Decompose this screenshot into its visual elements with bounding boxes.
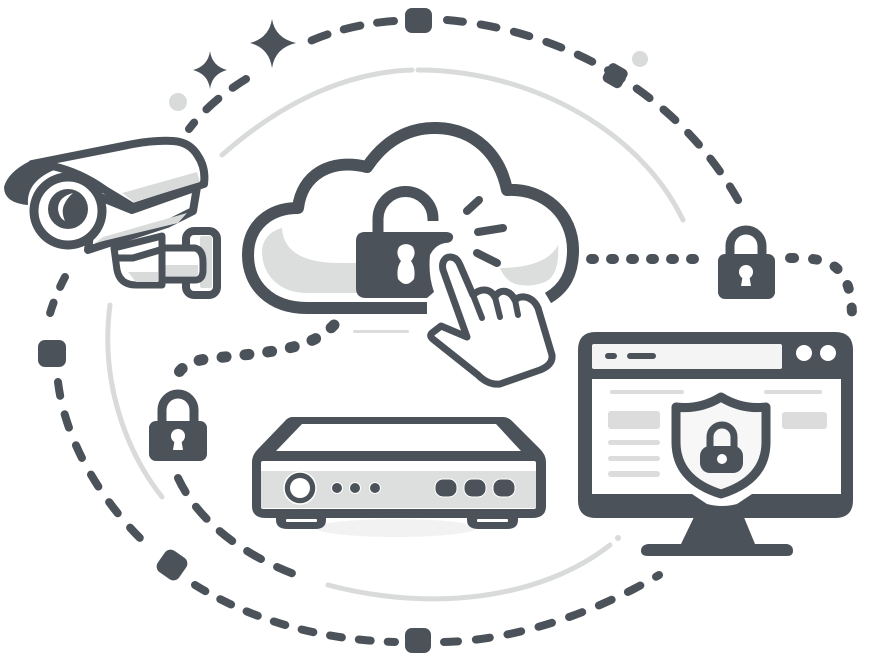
open padlock <box>356 192 453 298</box>
shield with padlock <box>676 397 766 494</box>
monitor frame <box>578 332 853 518</box>
dashed network ring <box>48 20 743 642</box>
dotted link: cloud to padlock to router <box>176 325 334 378</box>
icon: cloud <box>248 128 573 384</box>
camera mount <box>114 231 217 295</box>
page placeholders <box>608 390 827 477</box>
light inner ring <box>108 70 683 599</box>
camera hood tip <box>4 161 54 205</box>
router knob <box>284 472 316 504</box>
window buttons <box>796 345 812 361</box>
router buttons <box>435 479 515 497</box>
address bar <box>592 344 782 369</box>
icon: padlock right <box>718 230 775 299</box>
pointing hand <box>431 257 552 384</box>
faint cloud underline <box>353 330 409 333</box>
ring nodes <box>38 8 630 653</box>
decorative sparkles <box>169 19 648 111</box>
icon: security camera <box>4 141 217 295</box>
camera lower body <box>88 187 197 250</box>
icon: monitor <box>578 332 853 556</box>
router LEDs <box>332 482 380 494</box>
icon: padlock left <box>149 394 207 461</box>
icon: router <box>252 417 546 537</box>
monitor stand <box>641 515 793 556</box>
router case <box>252 417 546 518</box>
router feet <box>276 514 518 529</box>
dotted link: cloud to padlock to monitor <box>591 258 852 318</box>
click rays <box>467 200 503 263</box>
cloud shading <box>262 228 558 293</box>
camera lens <box>34 177 102 245</box>
monitor screen <box>592 379 841 506</box>
camera hood <box>32 141 204 207</box>
